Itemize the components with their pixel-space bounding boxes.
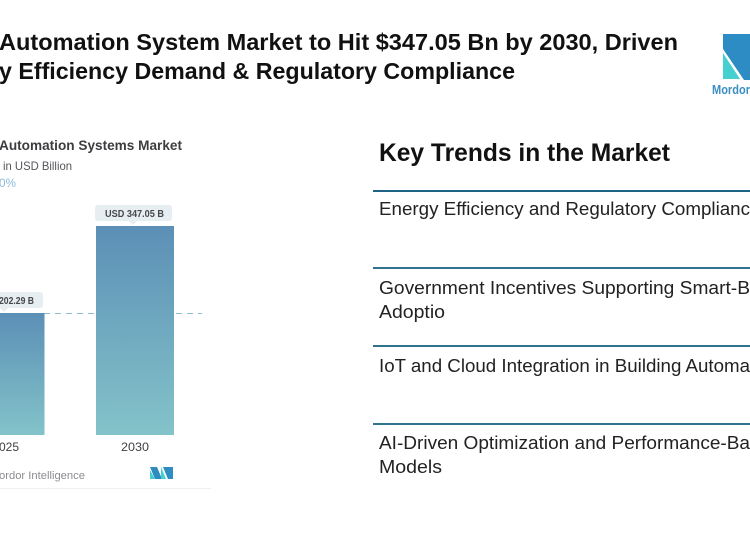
trend 2 (379, 278, 750, 322)
title: y Efficiency Demand & Regulatory Compliance (0, 58, 515, 84)
trend 4: AI-Driven Optimization and Performance-Ba (379, 433, 750, 453)
panel: key trends (373, 139, 750, 477)
icon: small Mordor logo (150, 467, 173, 479)
bar: 2025 (0, 313, 44, 435)
chart subtitle: in USD Billion (3, 159, 72, 173)
panel: market chart (0, 137, 211, 488)
value label: 2030 (95, 205, 172, 225)
chart title: Automation Systems Market (0, 137, 182, 153)
trend 4 (379, 433, 750, 477)
heading: key trends: Key Trends in the Market (379, 139, 671, 167)
title: Automation System Market to Hit $347.05 Bn by 2030, Driven (0, 29, 678, 55)
value label: 2025: 202.29 B (0, 296, 34, 307)
trend 1: Energy Efficiency and Regulatory Complianc (379, 199, 750, 219)
source credit: ordor Intelligence (0, 470, 85, 482)
dashed reference line (0, 312, 202, 314)
bar: 2030 (96, 226, 174, 435)
axis label: 2030: 2030 (121, 440, 149, 454)
value label: 2025 (0, 292, 43, 312)
trend 2: Adoptio (379, 302, 445, 322)
trend 4: Models (379, 457, 442, 477)
trend 2: Government Incentives Supporting Smart-B (379, 278, 750, 298)
icon: Mordor Intelligence logo (712, 34, 750, 97)
trend 3: IoT and Cloud Integration in Building Automa (379, 356, 750, 376)
value label: 2030: USD 347.05 B (105, 209, 164, 220)
title (0, 29, 678, 84)
